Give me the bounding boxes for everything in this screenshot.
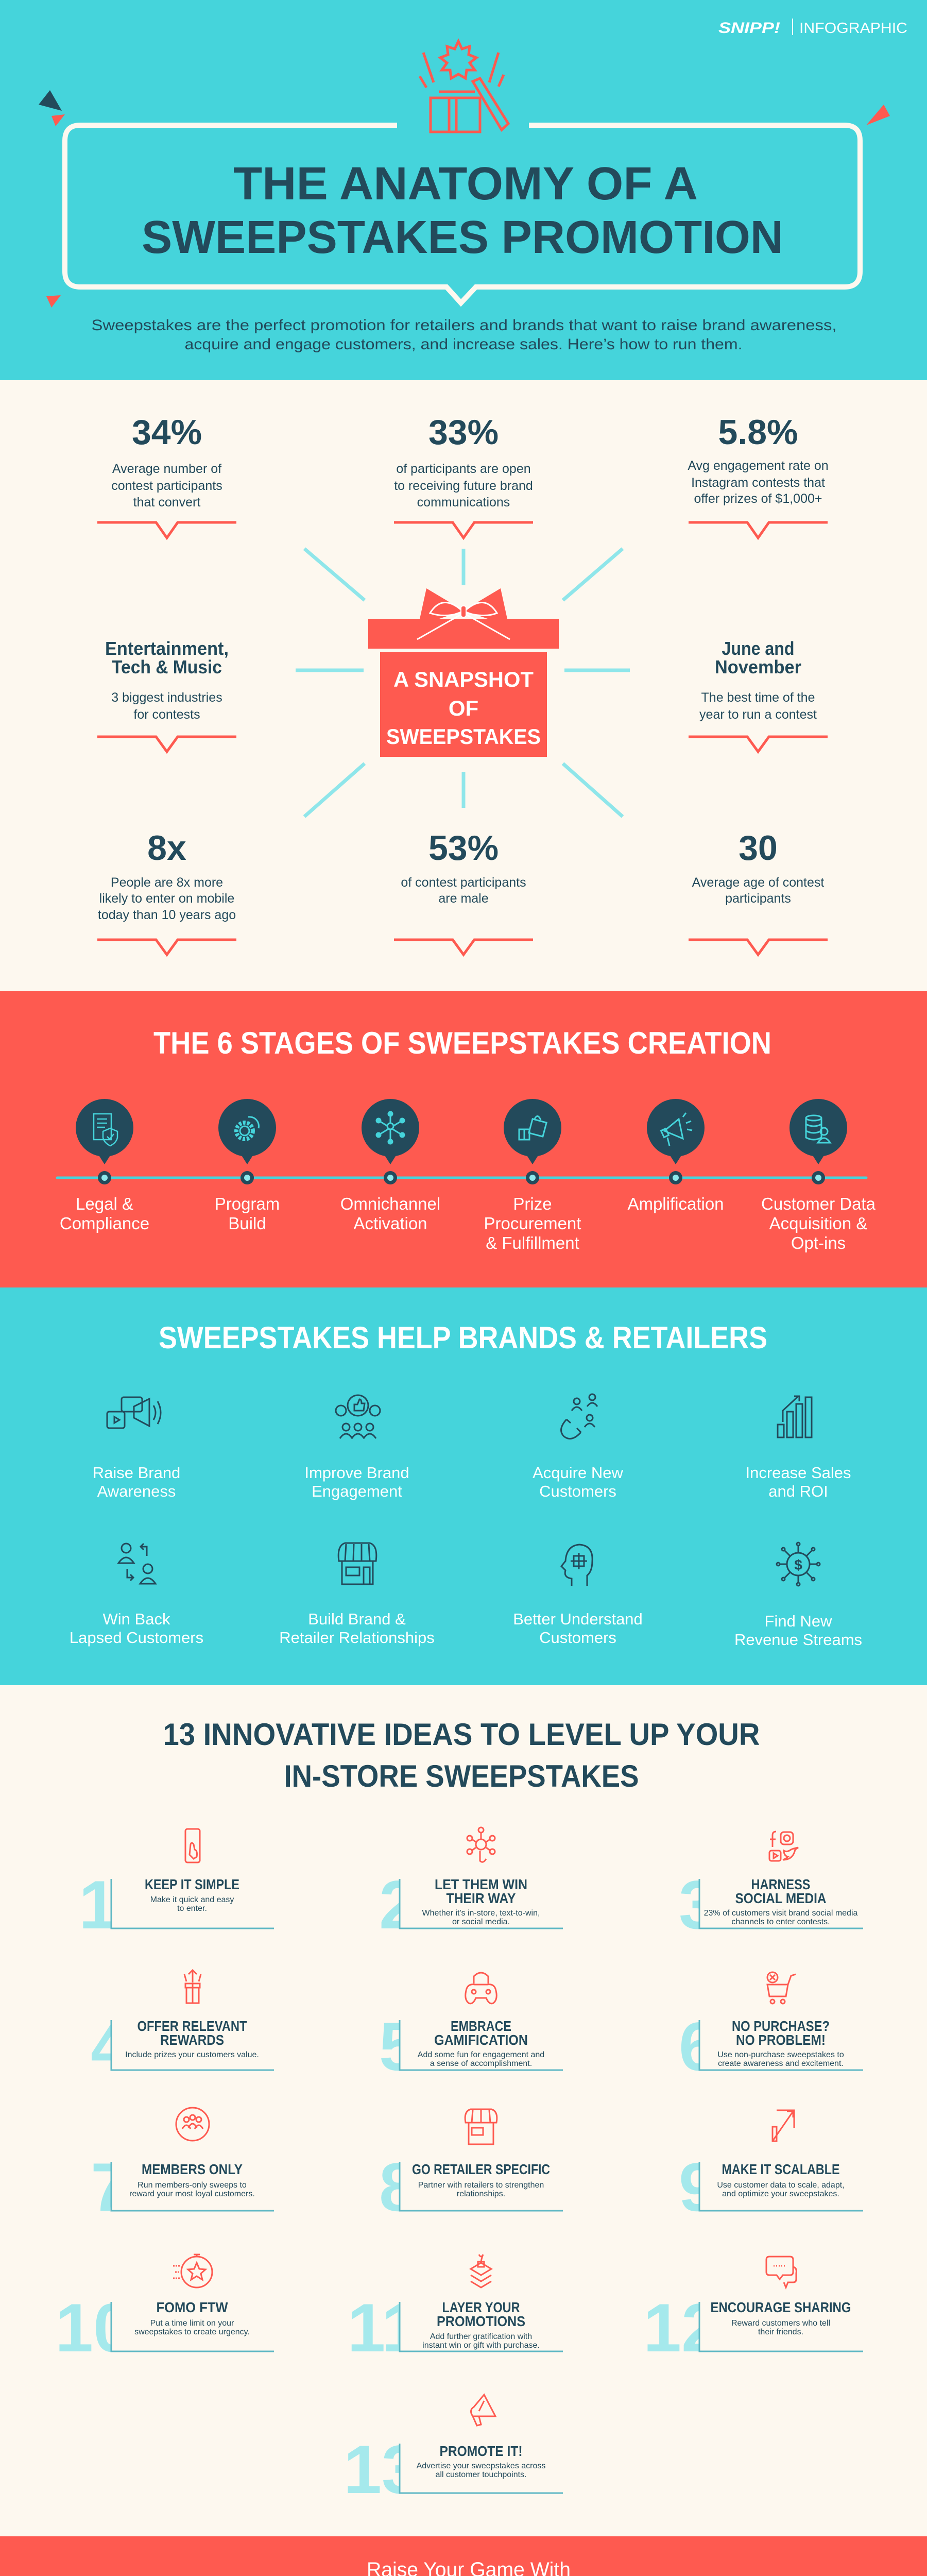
logo: snipp infographic: SNIPP!: [718, 20, 780, 37]
idea 3: 23% of customers visit brand social media: [704, 1909, 858, 1918]
idea 11: LAYER YOUR: [442, 2299, 520, 2315]
logo: snipp infographic: [718, 19, 907, 37]
idea 2: [379, 1827, 563, 1943]
idea 13: [344, 2395, 563, 2508]
stage 1: legal: Compliance: [60, 1214, 149, 1233]
title: SWEEPSTAKES PROMOTION: [142, 212, 783, 263]
stat: 8x: [97, 828, 236, 955]
idea 8: relationships.: [457, 2190, 505, 2198]
benefit: improve engagement: Engagement: [312, 1482, 402, 1500]
stat: 34%: 34%: [132, 413, 202, 452]
idea 4: 4: [91, 2009, 129, 2085]
heading: 13 ideas: 13 INNOVATIVE IDEAS TO LEVEL UP YOUR: [163, 1717, 760, 1752]
stage 4: prize: & Fulfillment: [486, 1233, 579, 1252]
stage 2: program build: Program: [215, 1194, 280, 1213]
idea 13: Advertise your sweepstakes across: [417, 2462, 545, 2470]
stat: 8x: People are 8x more: [111, 875, 223, 890]
idea 2: or social media.: [452, 1918, 510, 1926]
benefit: improve engagement: [304, 1395, 409, 1500]
stat: june and november: June and: [722, 638, 794, 659]
stat: 33%: 33%: [428, 413, 499, 452]
idea 1: Make it quick and easy: [150, 1895, 234, 1904]
idea 5: [379, 1973, 563, 2085]
stat: 33%: [394, 413, 533, 538]
benefit: increase sales: and ROI: [768, 1482, 828, 1500]
rays: [296, 549, 630, 817]
benefit: improve engagement: Improve Brand: [304, 1464, 409, 1482]
stage 2: program build: [215, 1099, 280, 1233]
benefit: revenue streams: Revenue Streams: [734, 1631, 862, 1649]
idea 5: GAMIFICATION: [434, 2032, 528, 2048]
idea 10: 10: [55, 2290, 131, 2366]
benefit: understand customers: Customers: [539, 1629, 616, 1647]
stat: 5.8%: Avg engagement rate on: [688, 459, 829, 473]
benefit: raise brand awareness: Raise Brand: [93, 1464, 180, 1482]
title speech bubble: [65, 125, 860, 303]
idea 11: Add further gratification with: [430, 2332, 532, 2341]
panel: 6 stages: [0, 991, 927, 1287]
center gift: a snapshot of sweepstakes: [368, 588, 559, 757]
idea 8: GO RETAILER SPECIFIC: [412, 2161, 550, 2177]
stage 4: prize: Prize: [513, 1194, 552, 1213]
stat: 33%: to receiving future brand: [394, 479, 533, 493]
stage 3: omnichannel: [340, 1099, 440, 1233]
stat: 5.8%: offer prizes of $1,000+: [694, 492, 822, 506]
idea 4: OFFER RELEVANT: [137, 2018, 247, 2034]
stat: 8x: today than 10 years ago: [98, 908, 236, 922]
center gift: a snapshot of sweepstakes: SWEEPSTAKES: [386, 724, 541, 749]
stat: industries: Tech & Music: [112, 656, 222, 677]
panel: snipp platform: [0, 2536, 927, 2576]
stage 6: customer data: Acquisition &: [769, 1214, 867, 1233]
stat: 5.8%: 5.8%: [718, 413, 798, 452]
idea 10: sweepstakes to create urgency.: [134, 2328, 250, 2336]
idea 9: MAKE IT SCALABLE: [722, 2161, 839, 2177]
idea 12: ENCOURAGE SHARING: [711, 2299, 851, 2315]
logo: snipp infographic: INFOGRAPHIC: [799, 20, 907, 37]
stat: 53%: of contest participants: [401, 875, 526, 890]
stat: 8x: likely to enter on mobile: [99, 891, 234, 906]
idea 12: their friends.: [758, 2328, 803, 2336]
idea 11: instant win or gift with purchase.: [422, 2341, 540, 2350]
benefit: increase sales: Increase Sales: [745, 1464, 851, 1482]
stat: 5.8%: Instagram contests that: [691, 476, 825, 490]
heading: 6 stages: THE 6 STAGES OF SWEEPSTAKES CREATION: [153, 1026, 771, 1060]
stat: 30: 30: [739, 828, 778, 868]
benefit: build relationships: Build Brand &: [308, 1610, 406, 1628]
idea 4: [91, 1970, 274, 2085]
stage 5: amplification: Amplification: [627, 1194, 724, 1213]
idea 7: 7: [91, 2149, 129, 2226]
benefit: revenue streams: Find New: [765, 1612, 832, 1630]
benefit: increase sales: [745, 1396, 851, 1500]
panel: snapshot stats: [0, 380, 927, 991]
stat: industries: [97, 638, 236, 752]
title: [142, 158, 783, 263]
idea 7: Run members-only sweeps to: [138, 2181, 247, 2190]
idea 12: [643, 2257, 863, 2366]
idea 5: 5: [379, 2009, 417, 2085]
idea 5: a sense of accomplishment.: [430, 2059, 532, 2068]
stat: 34%: contest participants: [111, 479, 222, 493]
stage 4: prize: Procurement: [484, 1214, 581, 1233]
heading: 13 ideas: [163, 1717, 760, 1793]
idea 6: [679, 1972, 863, 2085]
icon: opened gift box: [420, 41, 508, 132]
idea 9: Use customer data to scale, adapt,: [717, 2181, 845, 2190]
stat: 30: [689, 828, 828, 955]
stage 1: legal: Legal &: [76, 1194, 133, 1213]
stat: 34%: Average number of: [112, 462, 221, 476]
stage 3: omnichannel: Activation: [353, 1214, 427, 1233]
stat: industries: Entertainment,: [105, 638, 229, 659]
idea 12: 12: [643, 2290, 719, 2366]
idea 3: channels to enter contests.: [731, 1918, 830, 1926]
heading: help brands: SWEEPSTAKES HELP BRANDS & RETAILERS: [159, 1320, 767, 1355]
benefit: revenue streams: $: [794, 1557, 802, 1573]
idea 2: THEIR WAY: [446, 1890, 516, 1906]
panel: sweepstakes help brands: [0, 1287, 927, 1685]
benefit: build relationships: [279, 1543, 435, 1647]
idea 9: [679, 2110, 863, 2226]
idea 6: Use non-purchase sweepstakes to: [717, 2050, 844, 2059]
stage 4: prize: [484, 1099, 581, 1252]
idea 11: [347, 2255, 563, 2366]
stat: 34%: that convert: [133, 495, 200, 510]
idea 2: LET THEM WIN: [435, 1876, 527, 1892]
stage 5: amplification: [627, 1099, 724, 1213]
intro text: [92, 317, 836, 353]
benefit: win back: Lapsed Customers: [70, 1629, 203, 1647]
idea 9: 9: [679, 2149, 717, 2226]
stage 1: legal: [60, 1099, 149, 1233]
stat: 8x: 8x: [147, 828, 186, 868]
stat: 53%: 53%: [428, 828, 499, 868]
idea 6: create awareness and excitement.: [718, 2059, 844, 2068]
header panel: [0, 0, 927, 380]
stat: 33%: communications: [417, 495, 510, 510]
idea 1: [79, 1829, 274, 1943]
stat: 30: Average age of contest: [692, 875, 824, 890]
stage 6: customer data: [761, 1099, 876, 1252]
stage 3: omnichannel: Omnichannel: [340, 1194, 440, 1213]
idea 5: EMBRACE: [451, 2018, 511, 2034]
benefit: raise brand awareness: Awareness: [97, 1482, 176, 1500]
idea 8: Partner with retailers to strengthen: [418, 2181, 544, 2190]
stat: industries: 3 biggest industries: [111, 690, 222, 705]
idea 11: 11: [347, 2290, 420, 2366]
center gift: a snapshot of sweepstakes: A SNAPSHOT: [393, 667, 534, 691]
decorative triangles: [39, 90, 890, 308]
idea 4: REWARDS: [160, 2032, 224, 2048]
idea 13: 13: [344, 2432, 420, 2508]
idea 1: to enter.: [177, 1904, 207, 1913]
stat: industries: for contests: [133, 707, 200, 722]
idea 3: HARNESS: [751, 1876, 811, 1892]
stat: 5.8%: [688, 413, 829, 538]
intro text: acquire and engage customers, and increase sales. Here’s how to run them.: [184, 336, 743, 353]
benefit: acquire new customers: Customers: [539, 1482, 616, 1500]
stage 6: customer data: Opt-ins: [791, 1233, 846, 1252]
benefit: revenue streams: [734, 1543, 862, 1649]
benefit: acquire new customers: Acquire New: [533, 1464, 623, 1482]
idea 3: [679, 1832, 863, 1943]
benefit: build relationships: Retailer Relationships: [279, 1629, 435, 1647]
idea 1: KEEP IT SIMPLE: [145, 1876, 239, 1892]
idea 7: MEMBERS ONLY: [142, 2161, 243, 2177]
idea 7: [91, 2108, 274, 2226]
center gift: a snapshot of sweepstakes: OF: [449, 696, 478, 720]
stat: june and november: year to run a contest: [699, 707, 817, 722]
panel: 13 ideas: [0, 1685, 927, 2536]
idea 1: 1: [79, 1867, 117, 1943]
idea 10: FOMO FTW: [157, 2299, 228, 2315]
benefit: win back: [70, 1544, 203, 1647]
idea 2: 2: [379, 1867, 417, 1943]
idea 3: 3: [679, 1867, 717, 1943]
benefit: acquire new customers: [533, 1394, 623, 1500]
benefit: understand customers: Better Understand: [513, 1610, 643, 1628]
idea 6: NO PROBLEM!: [736, 2032, 826, 2048]
idea 7: reward your most loyal customers.: [129, 2190, 255, 2198]
stage 2: program build: Build: [228, 1214, 266, 1233]
idea 10: [55, 2255, 274, 2366]
benefit: raise brand awareness: [93, 1397, 180, 1500]
idea 9: and optimize your sweepstakes.: [722, 2190, 839, 2198]
stat: 30: participants: [725, 891, 791, 906]
stat: 34%: [97, 413, 236, 538]
stage 6: customer data: Customer Data: [761, 1194, 876, 1213]
title: THE ANATOMY OF A: [233, 158, 698, 210]
idea 8: [379, 2109, 563, 2226]
idea 8: 8: [379, 2149, 417, 2226]
heading: 13 ideas: IN-STORE SWEEPSTAKES: [284, 1759, 639, 1793]
benefit: win back: Win Back: [103, 1610, 170, 1628]
stat: june and november: November: [715, 656, 801, 677]
timeline: [57, 1177, 866, 1179]
stat: june and november: [689, 638, 828, 752]
idea 3: SOCIAL MEDIA: [735, 1890, 826, 1906]
idea 12: Reward customers who tell: [731, 2319, 830, 2328]
stat: june and november: The best time of the: [701, 690, 815, 705]
stat: 53%: are male: [438, 891, 489, 906]
intro text: Sweepstakes are the perfect promotion for retailers and brands that want to raise brand awareness,: [92, 317, 836, 334]
idea 6: 6: [679, 2009, 717, 2085]
stat: 33%: of participants are open: [396, 462, 531, 476]
idea 6: NO PURCHASE?: [732, 2018, 830, 2034]
idea 13: PROMOTE IT!: [440, 2443, 522, 2459]
idea 11: PROMOTIONS: [437, 2313, 525, 2329]
idea 5: Add some fun for engagement and: [418, 2050, 544, 2059]
idea 13: all customer touchpoints.: [436, 2470, 526, 2479]
idea 10: Put a time limit on your: [150, 2319, 234, 2328]
benefit: understand customers: [513, 1545, 643, 1647]
stat: 53%: [394, 828, 533, 955]
idea 2: Whether it's in-store, text-to-win,: [422, 1909, 540, 1918]
idea 4: Include prizes your customers value.: [125, 2050, 259, 2059]
